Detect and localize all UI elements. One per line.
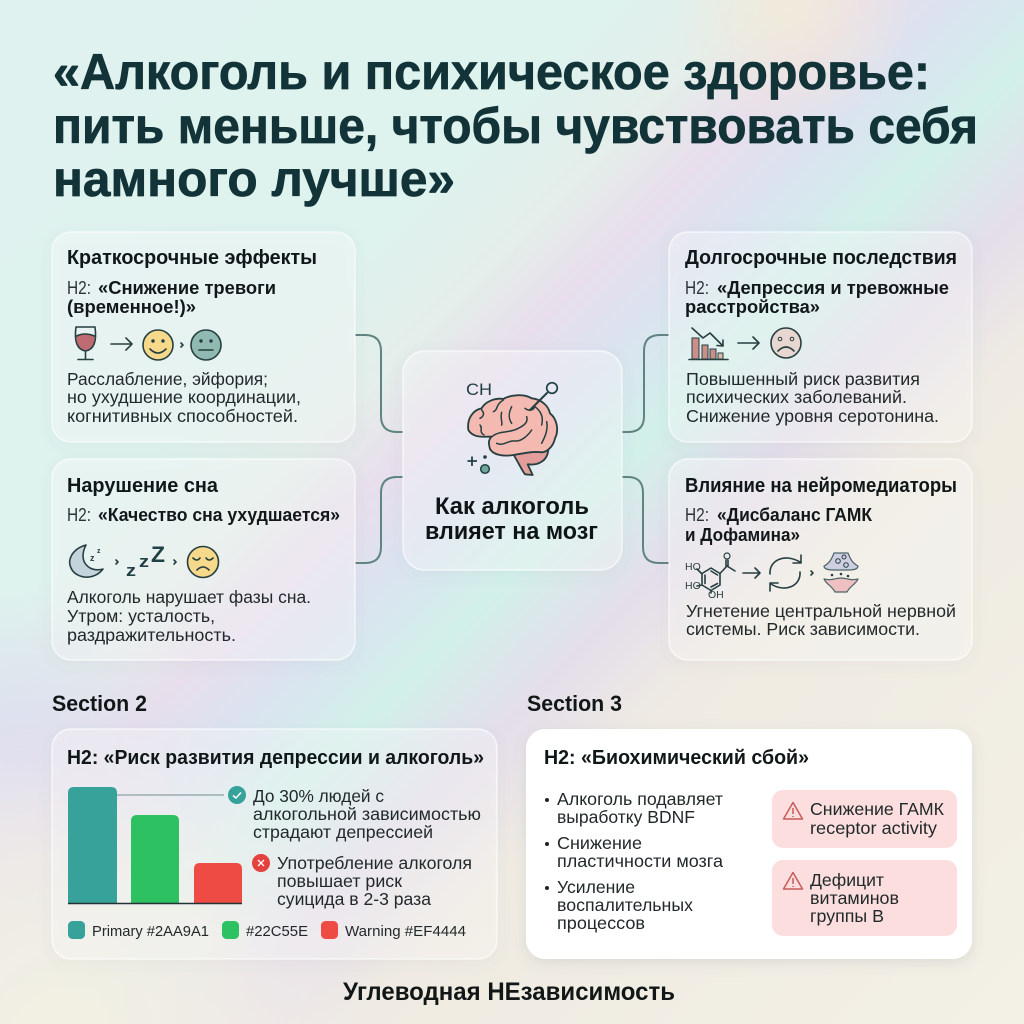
text: sleep phases: Алкоголь нарушает фазы сна. [67,587,311,607]
legend: #22C55E [246,923,308,940]
bullet list: пластичности мозга [557,851,723,871]
subheading: anxiety reduction: (временное!)» [67,297,196,317]
icon: brain with chemistry symbols [466,380,557,475]
legend [68,921,466,940]
text: sleep phases: раздражительность. [67,625,236,645]
heading: sleep disruption: Нарушение сна [67,474,219,497]
callout: 30 percent: страдают депрессией [253,822,433,842]
title: «Алкоголь и психическое здоровье: [53,44,930,100]
text: CNS depression: системы. Риск зависимости. [686,619,920,639]
text: relaxation and coordination: Расслабление, эйфория; [67,369,268,389]
subheading: GABA and dopamine: «Дисбаланс ГАМК [717,505,873,525]
callout: 30 percent [228,786,481,842]
icon: declining chart to sad face [689,328,801,360]
icon: molecule, cycle and synapse [685,553,858,601]
text: sleep phases: Утром: усталость, [67,606,215,626]
subheading: depression and anxiety: H2: [685,278,709,298]
icon: moon, zzz and sad face: z [90,553,95,563]
heading: center label: влияет на мозг [425,518,598,545]
callout: GABA receptor: receptor activity [810,818,937,838]
subheading: anxiety reduction [67,278,276,317]
subheading: depression and anxiety [685,278,949,317]
panel: short-term effects [52,232,355,442]
callout: suicide risk [252,853,472,909]
subheading: sleep quality: «Качество сна ухудшается» [98,505,340,525]
bullet list [545,789,723,933]
icon: moon, zzz and sad face [70,542,219,580]
callout: 30 percent: До 30% людей с [253,786,384,806]
connectors between center and panels [355,335,669,563]
subheading: sleep quality: H2: [67,505,91,525]
callout: vitamin deficiency [772,860,957,936]
heading: biochemical failure: H2: «Биохимический сбой» [544,746,809,769]
subheading: GABA and dopamine [685,505,873,545]
bullet list: Алкоголь подавляет [557,789,723,809]
text: risk and serotonin: Снижение уровня серотонина. [686,406,939,426]
legend: Primary #2AA9A1 [92,923,209,940]
callout: 30 percent: алкогольной зависимостью [253,804,481,824]
callout: suicide risk: суицида в 2-3 раза [277,889,431,909]
panel: long-term consequences [669,232,972,442]
bullet list: Снижение [557,833,642,853]
heading: short-term effects: Краткосрочные эффекты [67,246,317,269]
icon: moon, zzz and sad face: z [139,552,149,571]
bullet list: процессов [557,913,645,933]
icon: moon, zzz and sad face: z [126,561,136,580]
icon: molecule, cycle and synapse: HO [685,580,701,592]
panel: neurotransmitters [669,459,972,660]
heading: center label [425,493,598,545]
bullet list: выработку BDNF [557,807,695,827]
icon: wine glass to moods [75,327,221,360]
panel: biochemical failure [526,729,972,959]
text: relaxation and coordination: но ухудшение координации, [67,387,301,407]
text: sleep phases [67,587,311,645]
text: relaxation and coordination: когнитивных способностей. [67,406,298,426]
panel: sleep disruption [52,459,355,660]
heading: depression risk: H2: «Риск развития депрессии и алкоголь» [67,746,484,769]
subheading: anxiety reduction: «Снижение тревоги [98,278,276,298]
callout: suicide risk: повышает риск [277,871,402,891]
text: risk and serotonin: психических заболеваний. [686,387,907,407]
subheading: depression and anxiety: расстройства» [685,297,820,317]
text: risk and serotonin: Повышенный риск развития [686,369,920,389]
heading: long-term consequences: Долгосрочные последствия [685,246,957,269]
heading: section 2: Section 2 [52,691,147,716]
callout: suicide risk: Употребление алкоголя [277,853,472,873]
subheading: depression and anxiety: «Депрессия и тревожные [717,278,949,298]
text: relaxation and coordination [67,369,301,426]
subheading: GABA and dopamine: и Дофамина» [685,525,800,545]
heading: neurotransmitters: Влияние на нейромедиаторы [685,474,957,497]
subheading: anxiety reduction: H2: [67,278,91,298]
subheading: GABA and dopamine: H2: [685,505,709,525]
callout: vitamin deficiency: группы В [810,906,884,926]
panel: depression risk chart [52,729,497,959]
bullet list: воспалительных [557,895,693,915]
icon: moon, zzz and sad face: z [97,548,101,555]
icon: moon, zzz and sad face: Z [151,542,165,567]
title: пить меньше, чтобы чувствовать себя [53,98,978,154]
text: CNS depression: Угнетение центральной нервной [686,601,956,621]
footer brand: Углеводная НЕзависимость [343,978,675,1006]
legend: Warning #EF4444 [345,923,466,940]
panel: center brain [403,351,622,570]
bullet list: Усиление [557,877,635,897]
bar chart [68,787,242,904]
text: risk and serotonin [686,369,939,426]
title [53,44,978,207]
icon: molecule, cycle and synapse: HO [685,561,701,573]
icon: molecule, cycle and synapse: OH [708,589,724,601]
callout: GABA receptor [772,790,957,848]
heading: section 3: Section 3 [527,691,622,716]
text: CNS depression [686,601,956,639]
title: намного лучше» [53,151,455,207]
heading: center label: Как алкоголь [435,493,589,520]
callout: GABA receptor: Снижение ГАМК [810,799,945,819]
callout: vitamin deficiency: Дефицит [810,870,884,890]
callout: vitamin deficiency: витаминов [810,888,899,908]
icon: brain with chemistry symbols: CH [466,380,492,399]
